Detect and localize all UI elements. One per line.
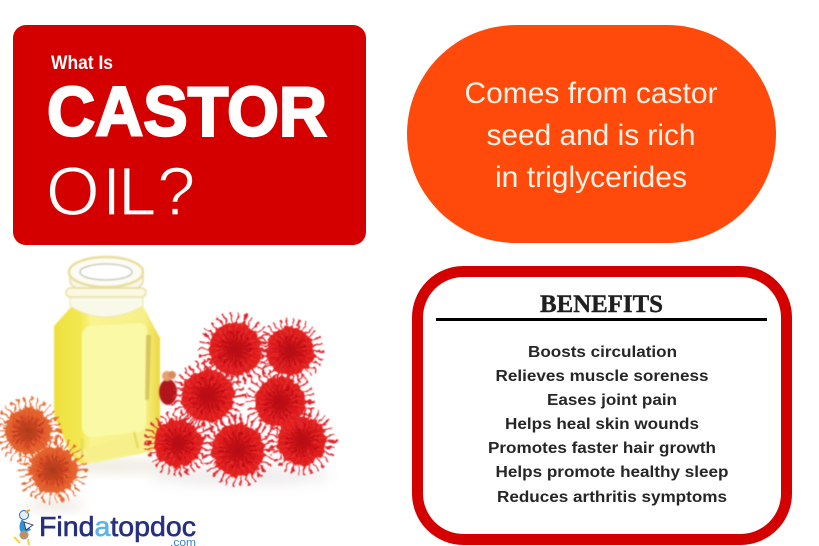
illustration: castor seed pods (3, 322, 330, 510)
heading: benefits: BENEFITS (540, 291, 663, 318)
panel: origin callout (407, 25, 776, 243)
list: benefits: Eases joint pain (547, 392, 677, 409)
list: benefits (488, 344, 728, 506)
text: origin description: seed and is rich (486, 119, 696, 152)
text: origin description: in triglycerides (495, 161, 687, 194)
oil body (54, 306, 160, 464)
heading: OIL?: OIL? (46, 153, 195, 230)
logo: Findatopdoc (14, 510, 196, 546)
list: benefits: Relieves muscle soreness (496, 368, 708, 385)
panel: benefits (418, 272, 786, 540)
glass neck (70, 296, 143, 317)
list: benefits: Promotes faster hair growth (488, 440, 716, 457)
list: benefits: Reduces arthritis symptoms (497, 489, 727, 506)
glass rim (69, 257, 143, 287)
heading: What Is: What Is (51, 53, 113, 74)
small seed pod (159, 371, 177, 405)
text: origin description: Comes from castor (464, 77, 718, 110)
heading: CASTOR: CASTOR (47, 72, 327, 150)
list: benefits: Boosts circulation (528, 344, 677, 361)
illustration: oil bottle (45, 257, 185, 472)
icon: doctor bird (14, 510, 33, 545)
text: origin description (464, 77, 718, 194)
panel: title (13, 25, 366, 245)
list: benefits: Helps promote healthy sleep (496, 464, 728, 481)
wordmark: Findatopdoc (39, 511, 196, 542)
list: benefits: Helps heal skin wounds (505, 416, 699, 433)
